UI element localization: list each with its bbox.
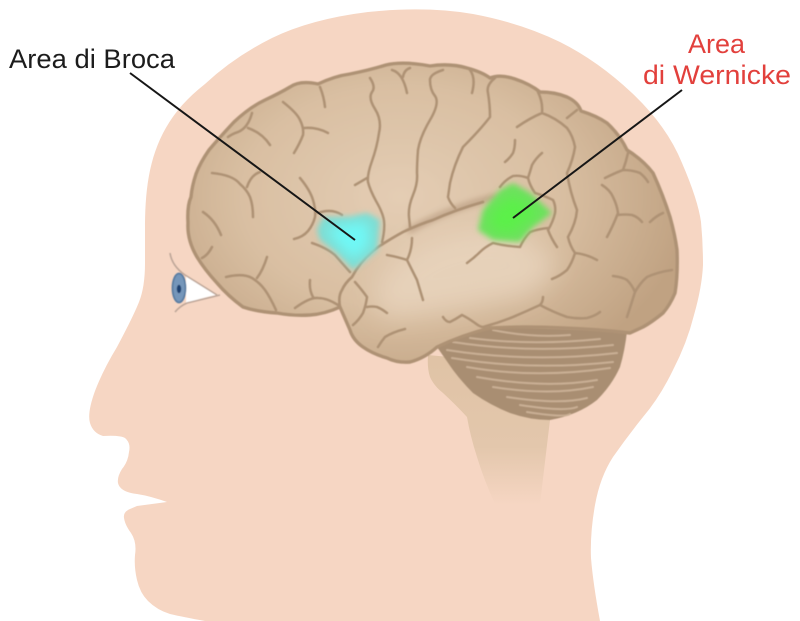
brain: [188, 63, 677, 362]
eye: sclera: [186, 276, 216, 304]
area di Broca highlight: [317, 213, 380, 270]
label: Area di Wernicke: [643, 29, 791, 90]
posterior sulci: [467, 92, 672, 317]
Broca core: [326, 222, 370, 260]
eye: pupil: [177, 285, 181, 293]
frontal and parietal sulci: [202, 68, 495, 310]
pointer line: Broca: [130, 73, 355, 240]
temporal sulci: [353, 238, 600, 347]
head silhouette: [89, 9, 703, 621]
lateral sulcus and temporal pole edge: [339, 202, 483, 307]
eye: lids: [170, 253, 220, 312]
Broca glow: [317, 213, 380, 270]
cerebrum outline: [188, 63, 677, 362]
area di Wernicke highlight: [478, 183, 552, 242]
pointer line: Wernicke: [513, 90, 682, 218]
label line: di Wernicke: di Wernicke: [643, 60, 791, 90]
label line: Area: Area: [688, 29, 746, 59]
lateral sulcus shadow: [410, 197, 495, 230]
cerebellum body: [437, 326, 627, 420]
cerebellum folia: [447, 330, 617, 416]
label: Area di Broca: Area di Broca: [9, 44, 176, 74]
temporal lobe: [372, 225, 560, 318]
cerebellum: [437, 326, 627, 420]
eye: iris: [172, 274, 186, 302]
Wernicke core: [488, 195, 540, 233]
brainstem: [428, 355, 550, 504]
Wernicke glow: [478, 183, 552, 242]
eye: [170, 253, 220, 312]
